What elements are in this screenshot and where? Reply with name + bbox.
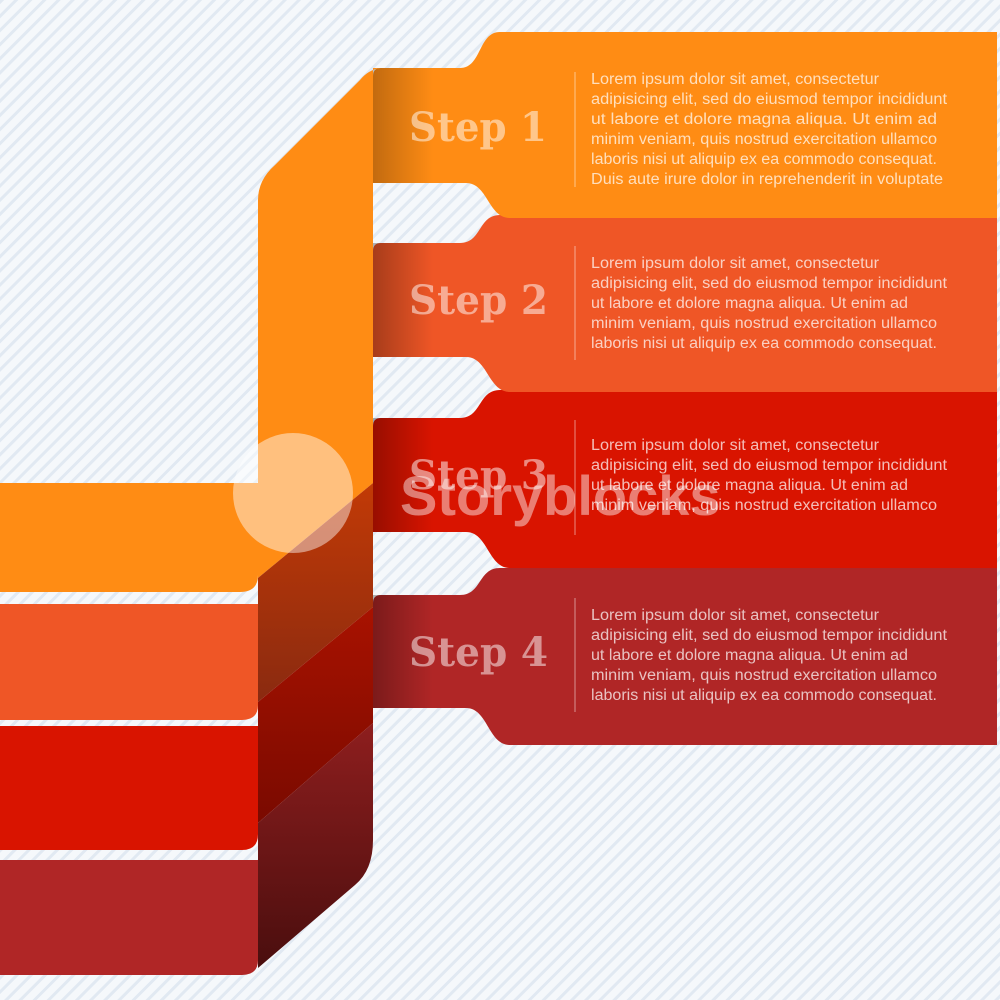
tab 3: ut labore et dolore magna aliqua. Ut enim ad [591, 477, 908, 494]
tab 3: Step 3 [409, 452, 548, 499]
tab 3: minim veniam, quis nostrud exercitation ullamco [591, 497, 937, 514]
tab 2: minim veniam, quis nostrud exercitation ullamco [591, 315, 937, 332]
tab 2: Step 2 [409, 277, 548, 324]
tab 4: adipisicing elit, sed do eiusmod tempor incididunt [591, 627, 948, 644]
tab 2 [373, 215, 997, 392]
tab 4: ut labore et dolore magna aliqua. Ut enim ad [591, 647, 908, 664]
watermark: Storyblocks [400, 464, 721, 527]
tab 3 [373, 390, 997, 568]
tab 1: ut labore et dolore magna aliqua. Ut enim ad [591, 111, 937, 128]
tab 2: adipisicing elit, sed do eiusmod tempor incididunt [591, 275, 948, 292]
watermark [233, 433, 721, 553]
tab 4 [373, 568, 997, 745]
tab 3: adipisicing elit, sed do eiusmod tempor incididunt [591, 457, 948, 474]
tab 2: laboris nisi ut aliquip ex ea commodo consequat. [591, 335, 937, 352]
tab 3: Lorem ipsum dolor sit amet, consectetur [591, 437, 879, 454]
ribbon column [258, 68, 380, 968]
tab 2: Lorem ipsum dolor sit amet, consectetur [591, 255, 879, 272]
tab 1: Step 1 [409, 104, 547, 151]
tab 4: Step 4 [409, 629, 548, 676]
tab 1: adipisicing elit, sed do eiusmod tempor incididunt [591, 91, 948, 108]
bar 2 [0, 604, 258, 720]
tab 1 [373, 32, 997, 218]
tab 1: minim veniam, quis nostrud exercitation ullamco [591, 131, 937, 148]
tab 4: minim veniam, quis nostrud exercitation ullamco [591, 667, 937, 684]
bar 1 [0, 483, 258, 592]
tab 1: Lorem ipsum dolor sit amet, consectetur [591, 71, 879, 88]
bar 4 [0, 860, 258, 975]
tab 2: ut labore et dolore magna aliqua. Ut enim ad [591, 295, 908, 312]
tab 1: Duis aute irure dolor in reprehenderit in voluptate [591, 171, 943, 188]
bar 3 [0, 726, 258, 850]
tab 1: laboris nisi ut aliquip ex ea commodo consequat. [591, 151, 937, 168]
tab 4: Lorem ipsum dolor sit amet, consectetur [591, 607, 879, 624]
tab 4: laboris nisi ut aliquip ex ea commodo consequat. [591, 687, 937, 704]
